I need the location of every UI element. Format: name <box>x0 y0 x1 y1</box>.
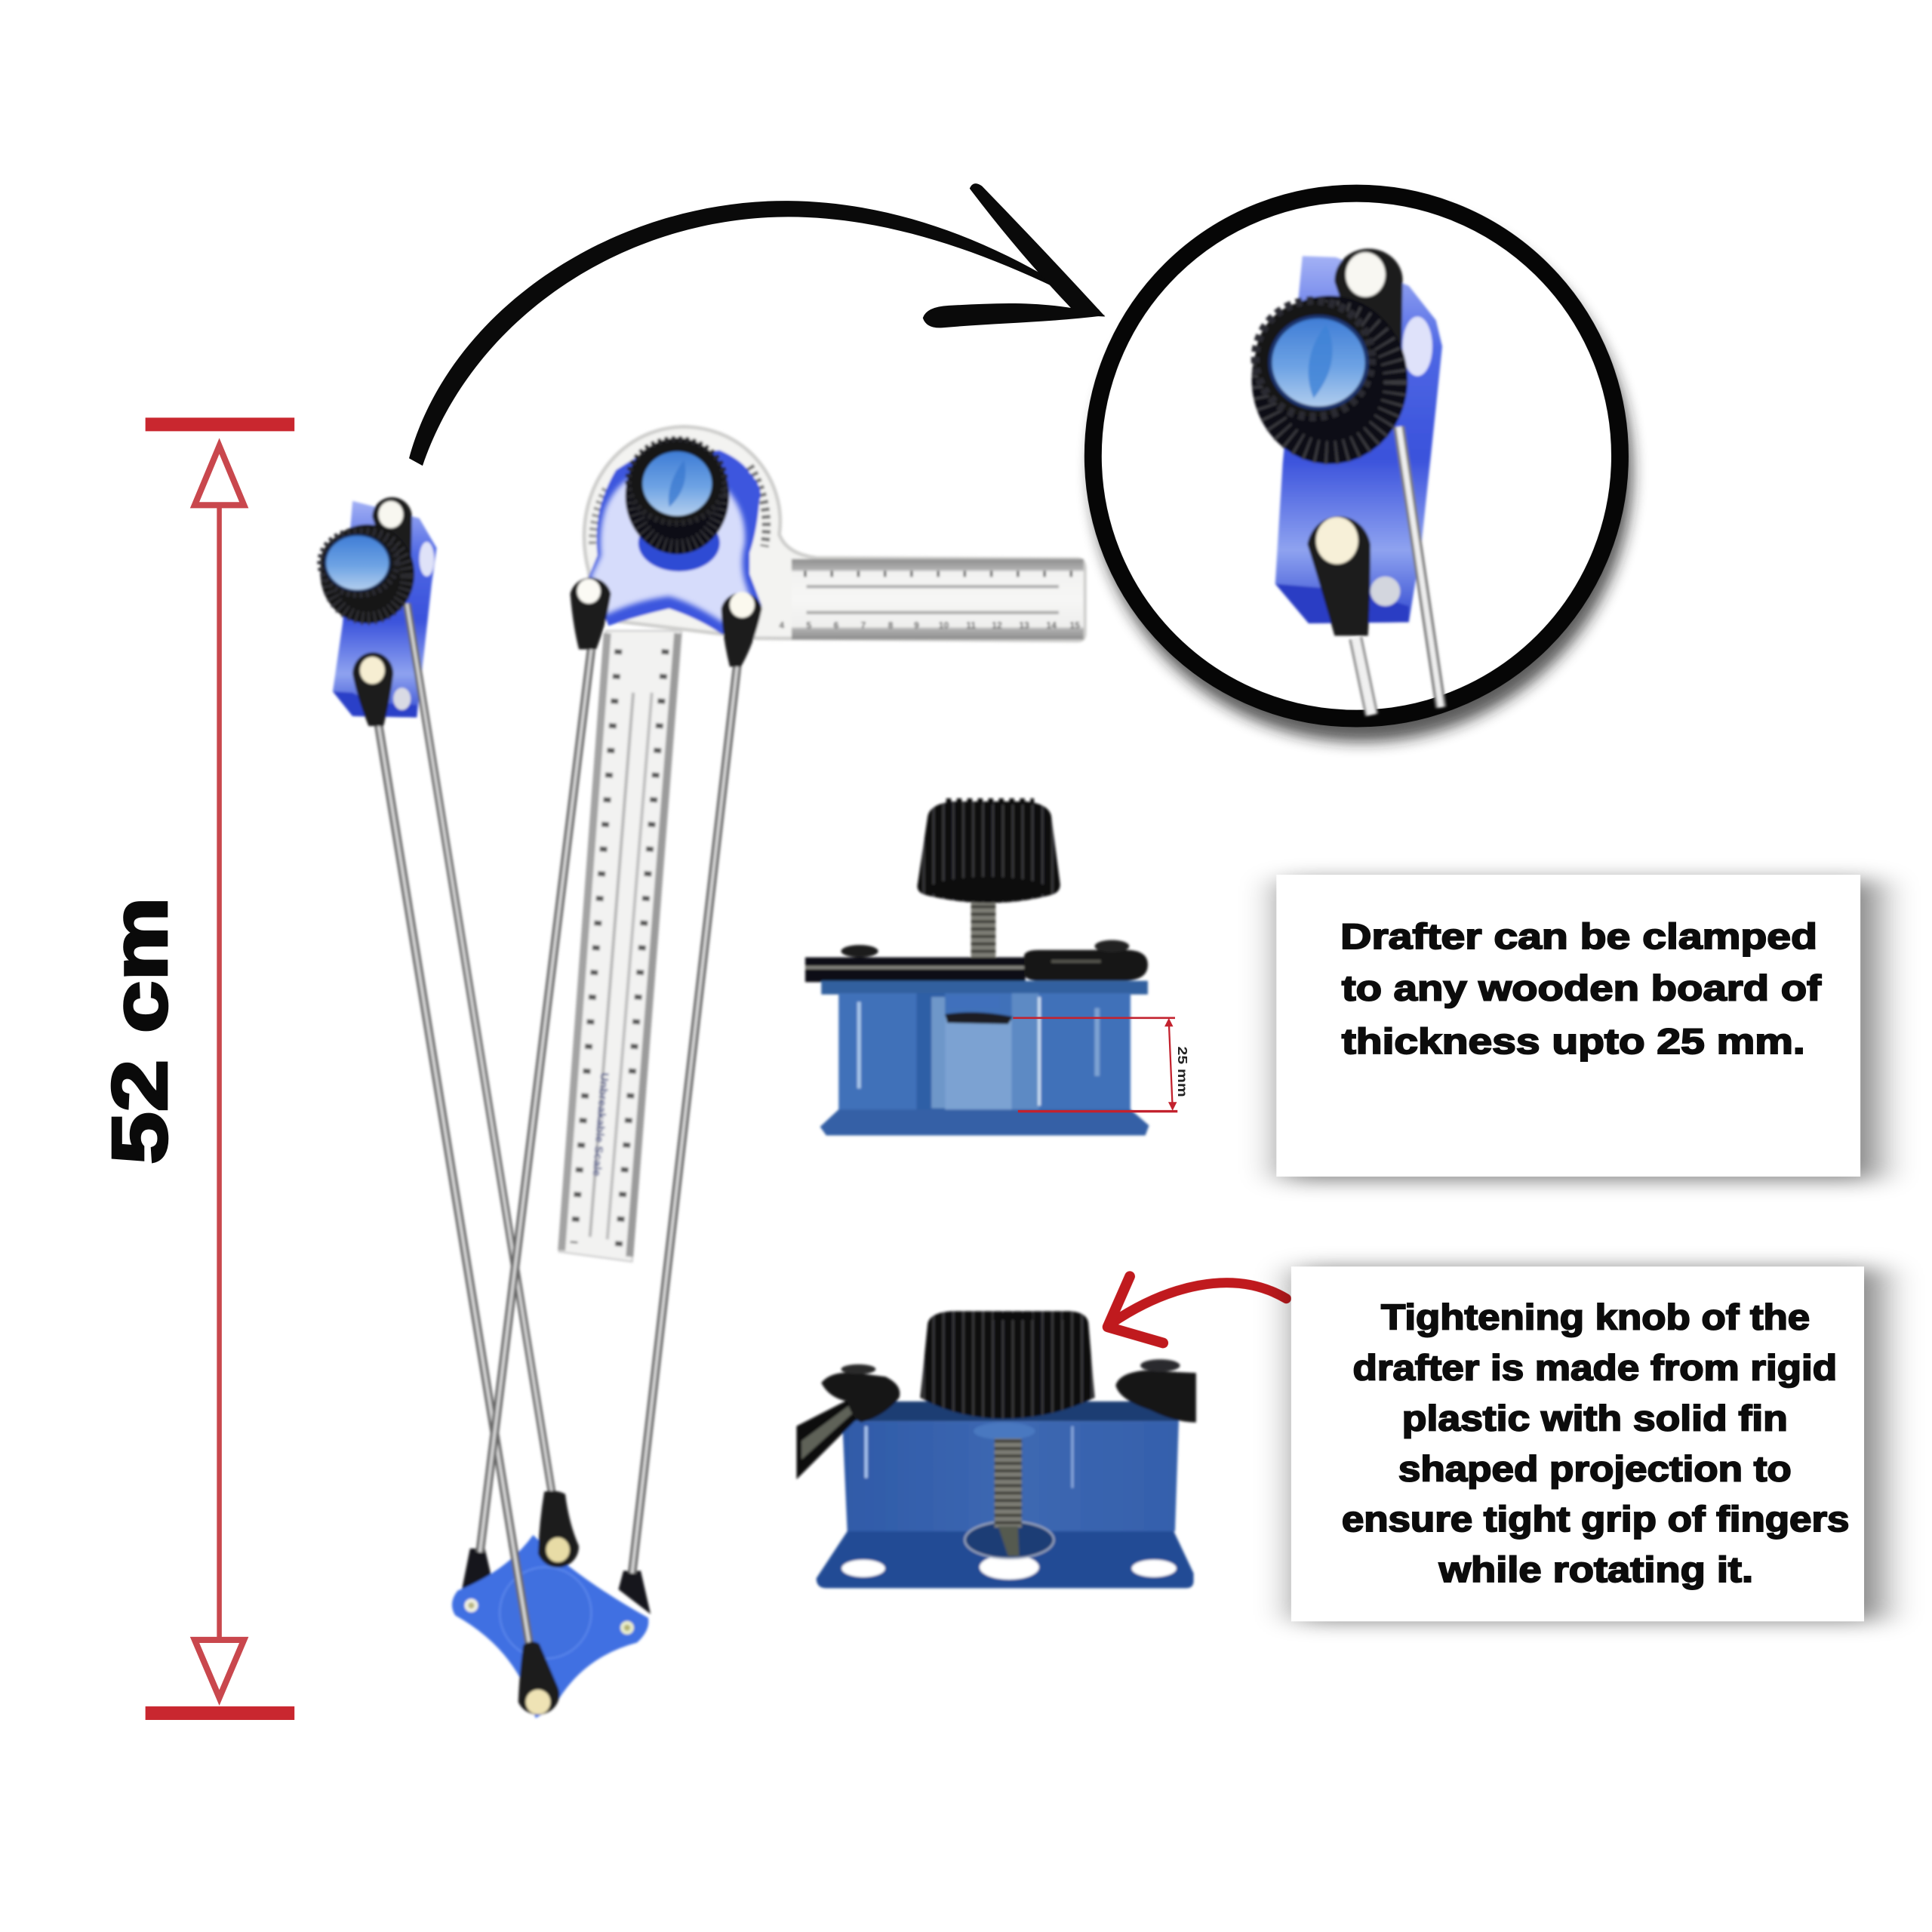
clamp 2 right pin <box>1115 1359 1196 1423</box>
clamp 1 bracket <box>820 981 1149 1136</box>
knob note card <box>1291 1266 1864 1621</box>
ruler numbers: 5 <box>806 620 811 631</box>
base bottom pin <box>518 1641 559 1715</box>
clamp 2 knob <box>920 1311 1094 1419</box>
horizontal ruler with protractor <box>584 426 1084 641</box>
circle shadow <box>1091 201 1632 742</box>
red curved arrow to knob <box>1108 1276 1286 1343</box>
clamp 2 bracket <box>817 1401 1194 1588</box>
panel: tightening knob note <box>1291 1266 1881 1621</box>
magnified rods <box>1355 638 1372 715</box>
dimension shaft <box>218 505 221 1638</box>
height dimension: 52 cm <box>96 417 294 1720</box>
knob note text: while rotating it. <box>1438 1550 1753 1590</box>
curved black arrow to magnified view <box>409 183 1105 466</box>
clamp note text <box>1340 917 1821 1062</box>
top pin <box>372 497 412 581</box>
knob shadow crescent <box>638 515 720 571</box>
clamp 2 screw <box>974 1423 1035 1556</box>
dimension bottom bar <box>146 1706 294 1720</box>
ruler numbers: 8 <box>888 620 894 631</box>
ruler numbers: 12 <box>992 620 1002 631</box>
head pin left <box>571 578 611 649</box>
ruler numbers: 7 <box>861 620 866 631</box>
base pins <box>518 1491 579 1715</box>
clamp note card <box>1276 875 1860 1177</box>
vertical ruler <box>559 631 681 1262</box>
ruler numbers: 6 <box>833 620 838 631</box>
knob note text: plastic with solid fin <box>1402 1398 1788 1438</box>
clamp photo: 25 mm thickness <box>805 801 1149 1136</box>
drafter photo <box>320 426 1084 1718</box>
ruler numbers: 13 <box>1019 620 1029 631</box>
base top pin <box>538 1491 579 1567</box>
ruler numbers: 4 <box>779 620 784 631</box>
clamp 1 screw <box>971 893 995 960</box>
knob note text: Tightening knob of the <box>1381 1298 1810 1338</box>
knob note text: drafter is made from rigid <box>1353 1348 1837 1388</box>
base left black socket <box>460 1549 494 1598</box>
clamp 2 holes <box>841 1560 885 1577</box>
ruler numbers: 14 <box>1046 620 1057 631</box>
magnified knob <box>1252 296 1407 464</box>
clamp 1 knob <box>918 801 1060 903</box>
ruler brand text: Unbreakable Scale <box>590 1072 610 1177</box>
ruler numbers: 10 <box>939 620 949 631</box>
head plate <box>589 451 762 635</box>
ruler numbers: 9 <box>914 620 919 631</box>
head pin right <box>721 592 762 666</box>
ruler numbers <box>779 620 1080 631</box>
knob note text <box>1342 1298 1849 1590</box>
clamp photo: tightening knob <box>796 1311 1196 1588</box>
clamp note text: thickness upto 25 mm. <box>1342 1022 1805 1062</box>
top left clamp knob and pins <box>320 497 414 726</box>
dimension top bar <box>146 417 294 431</box>
wheel knob <box>320 525 414 623</box>
clamp note shadow <box>1281 880 1878 1180</box>
dimension arrowhead up <box>195 446 244 505</box>
dimension arrowhead down <box>195 1640 244 1698</box>
base plate <box>452 1535 651 1718</box>
25 mm label: 25 mm <box>1175 1047 1190 1097</box>
circle frame <box>1093 193 1620 718</box>
ruler numbers: 11 <box>966 620 976 631</box>
magnified lower pin <box>1307 516 1371 635</box>
clamp note text: to any wooden board of <box>1342 969 1821 1009</box>
dimension label: 52 cm <box>96 897 183 1164</box>
knob note text: ensure tight grip of fingers <box>1342 1500 1849 1540</box>
magnified clamp <box>1252 248 1442 715</box>
base right black socket <box>618 1571 651 1614</box>
magnified circle view <box>1091 193 1632 742</box>
knob note shadow <box>1296 1268 1881 1621</box>
top left clamp plate <box>333 501 437 718</box>
head knob and pins <box>571 438 762 666</box>
panel: clamp note <box>1276 875 1878 1180</box>
clamp 1 rod and handle <box>805 940 1148 982</box>
bottom pin <box>352 652 393 726</box>
clamp 1 red thickness marker <box>1013 1018 1190 1112</box>
rods <box>379 604 737 1645</box>
ruler numbers: 15 <box>1069 620 1080 631</box>
clamp note text: Drafter can be clamped <box>1340 917 1817 957</box>
knob note text: shaped projection to <box>1398 1449 1792 1489</box>
clamp 2 left pin and rod <box>796 1364 900 1479</box>
magnified top pin <box>1334 248 1403 371</box>
